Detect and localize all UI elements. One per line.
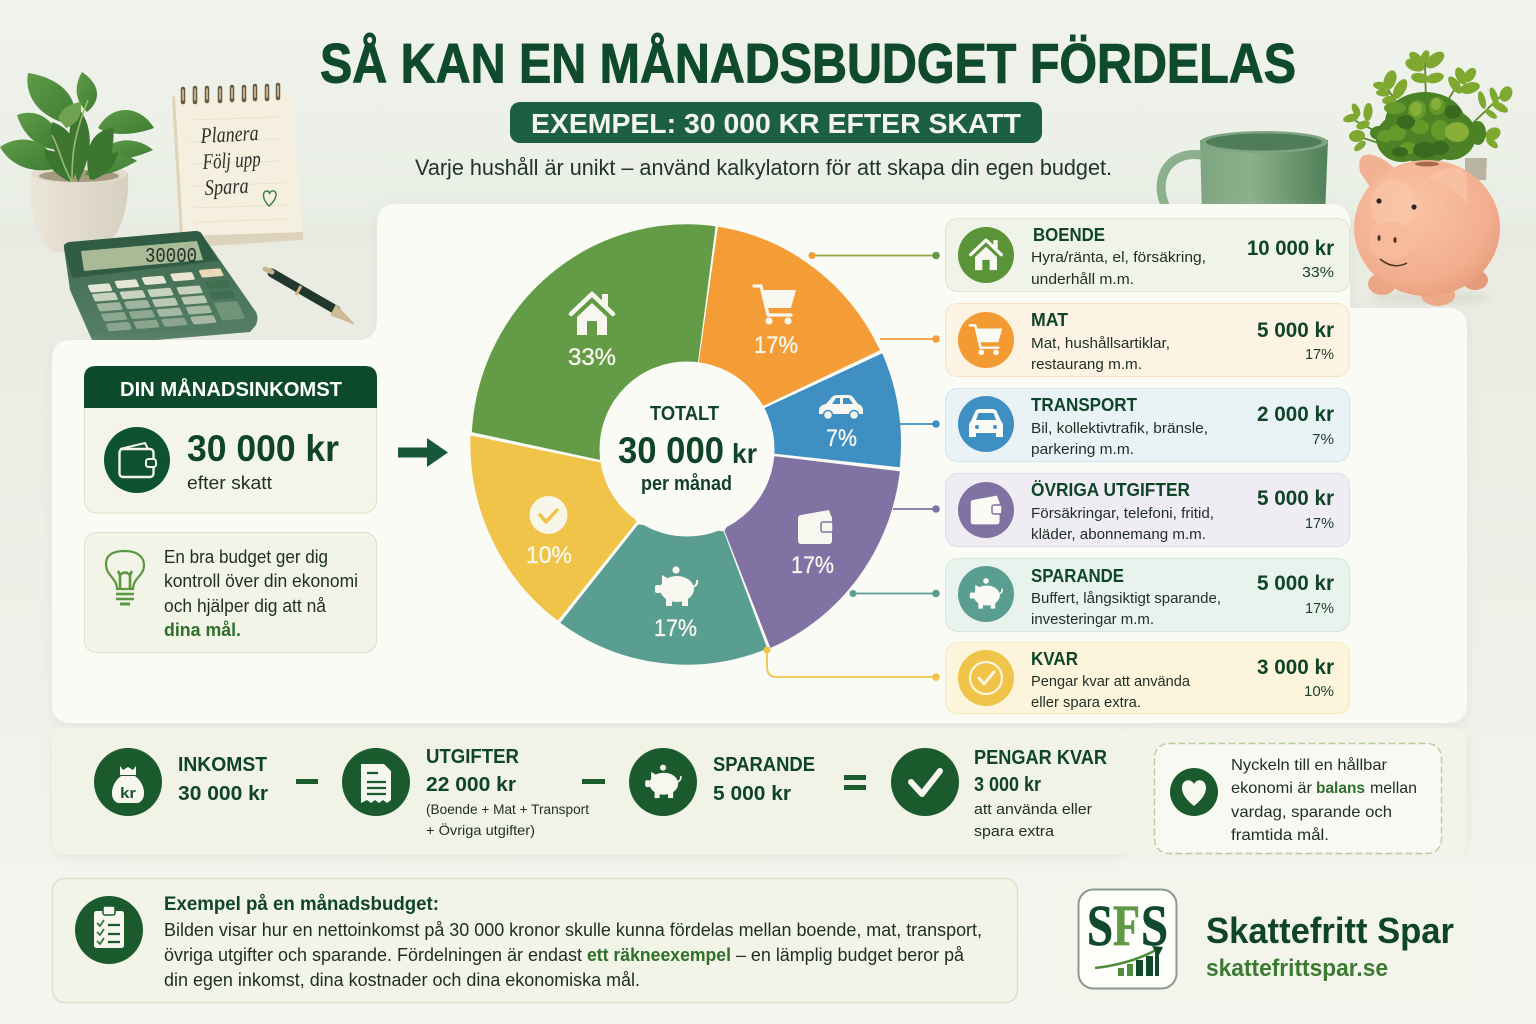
icon: check <box>958 650 1014 706</box>
icon: money bag <box>94 748 162 816</box>
panel: kvar card: eller spara extra. <box>1031 694 1141 711</box>
subtitle pill: EXEMPEL: 30 000 KR EFTER SKATT <box>531 108 1021 139</box>
logo: SFS <box>1078 890 1176 988</box>
panel: transport card: 2 000 kr <box>1257 403 1334 426</box>
panel: mat card: 17% <box>1305 346 1334 363</box>
tip text: En bra budget ger dig <box>164 547 328 567</box>
panel: mat card: restaurang m.m. <box>1031 356 1142 373</box>
panel: boende card <box>946 218 1350 292</box>
chart center: TOTALT <box>650 403 719 425</box>
connector lines <box>764 252 940 681</box>
chart center <box>600 362 774 536</box>
sparande text: SPARANDE <box>713 754 815 776</box>
illustration: piggy bank <box>1354 155 1500 306</box>
panel: boende card: 33% <box>1302 264 1334 281</box>
panel: transport card: TRANSPORT <box>1031 395 1137 415</box>
tip text: kontroll över din ekonomi <box>164 571 358 591</box>
pengar kvar text: spara extra <box>974 823 1055 840</box>
panel: boende card: 10 000 kr <box>1247 237 1334 260</box>
icon: cart <box>958 312 1014 368</box>
icon: light bulb <box>106 551 144 604</box>
icon: car <box>819 395 863 420</box>
callout: balance note: vardag, sparande och <box>1231 804 1392 821</box>
callout: balance note: Nyckeln till en hållbar <box>1231 756 1388 774</box>
income card header <box>84 366 377 408</box>
illustration: spiral notepad <box>172 85 303 246</box>
icon: piggy bank <box>958 566 1014 622</box>
panel: övriga utgifter card: 5 000 kr <box>1257 487 1334 510</box>
logo: SFS: F <box>1113 893 1140 958</box>
icon: receipt <box>342 748 410 816</box>
panel: övriga utgifter card <box>946 474 1350 546</box>
icon: clipboard <box>75 896 143 964</box>
utgifter text <box>426 746 589 838</box>
illustration: spiral notepad: Följ upp <box>201 146 261 174</box>
icon: house <box>958 227 1014 283</box>
panel: mat card: MAT <box>1031 310 1068 330</box>
illustration: spiral notepad: Spara <box>204 173 249 200</box>
utgifter text: UTGIFTER <box>426 746 520 768</box>
slice: boende 33% <box>472 225 715 459</box>
utgifter text: + Övriga utgifter) <box>426 821 535 838</box>
panel: kvar card: Pengar kvar att använda <box>1031 673 1191 690</box>
slice: transport 7% <box>765 354 901 467</box>
illustration: calculator <box>64 231 258 345</box>
panel: transport card <box>946 388 1350 462</box>
panel: kvar card <box>946 642 1350 714</box>
after tax label: efter skatt <box>187 473 272 493</box>
illustration: potted plant left <box>0 72 154 252</box>
inkomst text <box>178 754 268 805</box>
panel: monthly income card <box>84 366 377 513</box>
panel: boende card: underhåll m.m. <box>1031 271 1134 288</box>
inkomst text: 30 000 kr <box>178 783 268 805</box>
chart: budget donut <box>471 225 901 664</box>
panel: example explanation: din egen inkomst, dina kostnader och dina ekonomiska mål. <box>164 970 640 990</box>
title: SÅ KAN EN MÅNADSBUDGET FÖRDELAS <box>320 32 1296 94</box>
minus sign <box>296 779 318 784</box>
panel: example explanation: Bilden visar hur en nettoinkomst på 30 000 kronor skulle kunna fördelas mellan boende, mat, transport, <box>164 920 982 940</box>
panel: kvar card: 10% <box>1304 683 1334 700</box>
panel: övriga utgifter card: kläder, abonnemang m.m. <box>1031 526 1206 543</box>
panel: övriga utgifter card: Försäkringar, telefoni, fritid, <box>1031 505 1214 522</box>
panel: budget tip <box>84 532 376 652</box>
sparande text: 5 000 kr <box>713 783 791 805</box>
callout: balance note: ekonomi är <box>1231 780 1313 797</box>
icon: check <box>891 748 959 816</box>
equals sign <box>844 775 866 790</box>
panel: boende card: BOENDE <box>1033 225 1105 245</box>
panel: sparande card: 5 000 kr <box>1257 572 1334 595</box>
subtitle pill <box>510 102 1042 143</box>
panel: sparande card: SPARANDE <box>1031 566 1124 586</box>
illustration: pen <box>265 269 354 324</box>
chart center: kr <box>732 438 757 469</box>
panel: brand block <box>1055 878 1480 1000</box>
icon: cart <box>754 286 796 325</box>
arrow: income to chart <box>398 438 448 467</box>
icon: wallet <box>798 510 833 544</box>
icon: piggy bank <box>655 566 697 606</box>
panel: övriga utgifter card: ÖVRIGA UTGIFTER <box>1031 480 1190 500</box>
tip text: och hjälper dig att nå <box>164 596 327 616</box>
panel: sparande card: investeringar m.m. <box>1031 611 1154 628</box>
illustration: calculator: 30000 <box>145 246 197 269</box>
tip text <box>164 547 358 640</box>
panel: mat card: 5 000 kr <box>1257 319 1334 342</box>
slice: kvar 10% <box>471 436 636 620</box>
slice: mat 17% <box>699 227 879 405</box>
intro sentence: Varje hushåll är unikt – använd kalkylatorn för att skapa din egen budget. <box>415 155 1112 180</box>
panel: transport card: parkering m.m. <box>1031 441 1134 458</box>
callout: balance note: balans <box>1316 780 1365 797</box>
utgifter text: (Boende + Mat + Transport <box>426 801 589 817</box>
pengar kvar text <box>974 747 1108 840</box>
percent 17 orange: 17% <box>754 332 798 359</box>
panel: example explanation <box>52 878 1018 1002</box>
logo: SFS: S <box>1141 893 1168 958</box>
pengar kvar text: att använda eller <box>974 801 1092 818</box>
panel: calculation strip <box>52 728 1470 857</box>
icon: car <box>958 396 1014 452</box>
utgifter text: 22 000 kr <box>426 774 516 796</box>
panel: övriga utgifter card: 17% <box>1305 515 1334 532</box>
logo: SFS: S <box>1087 893 1113 958</box>
icon: wallet <box>104 427 170 493</box>
panel: boende card: Hyra/ränta, el, försäkring, <box>1031 249 1206 266</box>
icon: heart <box>1170 768 1218 816</box>
minus sign <box>582 779 605 784</box>
panel: sparande card: Buffert, långsiktigt sparande, <box>1031 590 1221 607</box>
panel: sparande card: 17% <box>1305 600 1334 617</box>
panel: example explanation: – en lämplig budget beror på <box>736 945 965 965</box>
icon: piggy bank <box>629 748 697 816</box>
income card header: DIN MÅNADSINKOMST <box>120 377 342 401</box>
income amount: 30 000 kr <box>187 428 339 469</box>
pengar kvar text: PENGAR KVAR <box>974 747 1108 769</box>
brand name: Skattefritt Spar <box>1206 910 1454 951</box>
percent 33: 33% <box>568 344 616 371</box>
panel: kvar card: 3 000 kr <box>1257 656 1334 679</box>
panel: kvar card: KVAR <box>1031 649 1078 669</box>
panel: mat card: Mat, hushållsartiklar, <box>1031 335 1170 352</box>
panel: example explanation: ett räkneexempel <box>587 945 731 965</box>
slice: övriga utgifter 17% <box>725 457 899 647</box>
percent 17 purple: 17% <box>791 552 834 579</box>
illustration: green mug <box>1161 131 1328 215</box>
illustration: spiral notepad: Planera <box>199 120 259 148</box>
icon: wallet <box>958 482 1014 538</box>
panel: sparande card <box>946 558 1350 632</box>
panel: mat card <box>946 304 1350 376</box>
icon: check circle <box>530 496 568 534</box>
icon: money bag: kr <box>120 785 136 802</box>
illustration: right plant <box>1342 48 1515 180</box>
percent 7: 7% <box>826 425 857 452</box>
callout: balance note: mellan <box>1370 780 1417 797</box>
chart center: 30 000 <box>618 430 724 471</box>
callout: balance note <box>1154 744 1442 854</box>
icon: house <box>571 294 613 335</box>
panel: transport card: Bil, kollektivtrafik, bränsle, <box>1031 420 1208 437</box>
pengar kvar text: 3 000 kr <box>974 774 1041 796</box>
panel: central cream panel <box>52 204 1467 727</box>
panel: example explanation: Exempel på en månadsbudget: <box>164 894 439 915</box>
percent 10: 10% <box>526 542 572 569</box>
panel: transport card: 7% <box>1312 431 1334 448</box>
slice: sparande 17% <box>561 525 767 664</box>
panel: example explanation: övriga utgifter och sparande. Fördelningen är endast <box>164 945 582 965</box>
percent 17 teal: 17% <box>654 615 697 642</box>
inkomst text: INKOMST <box>178 754 267 776</box>
sparande text <box>713 754 815 805</box>
brand url: skattefrittspar.se <box>1206 955 1388 982</box>
chart center: per månad <box>641 472 732 495</box>
tip text: dina mål. <box>164 620 241 640</box>
callout: balance note: framtida mål. <box>1231 826 1329 844</box>
